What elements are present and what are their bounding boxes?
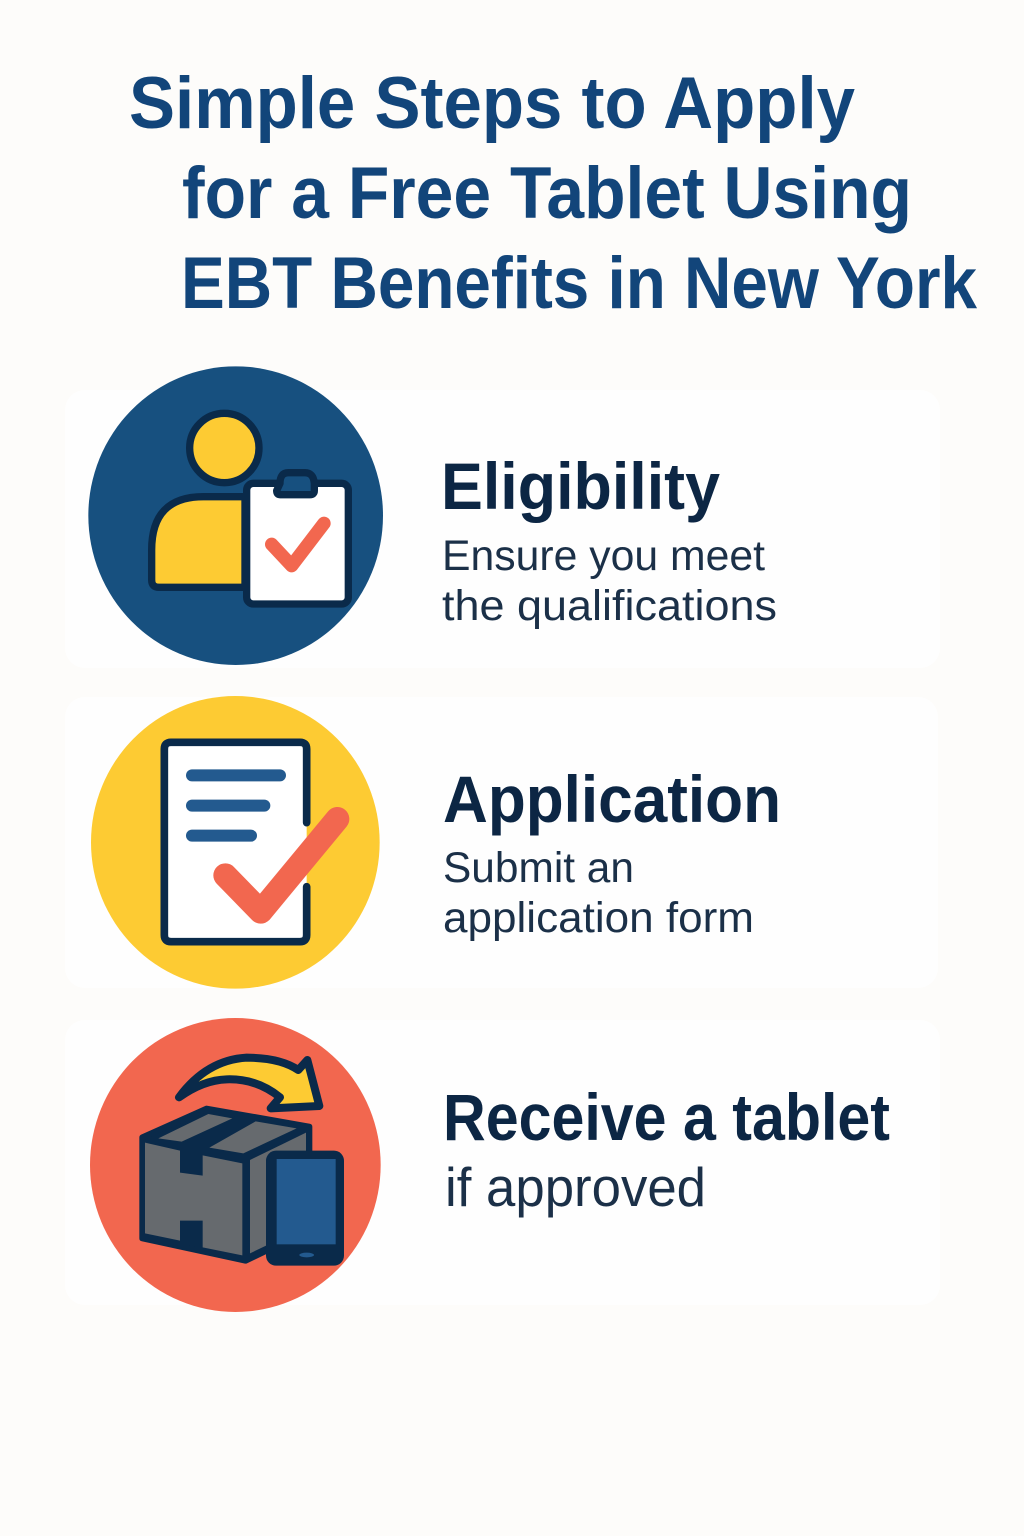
panel: receive a tablet [65, 1018, 940, 1312]
text: if approved: if approved [445, 1156, 706, 1218]
text: application description [443, 844, 754, 942]
text: eligibility description: Ensure you meet [442, 532, 765, 580]
panel: application [65, 696, 938, 989]
panel: eligibility [65, 366, 940, 668]
text: application description: Submit an [443, 844, 634, 892]
icon: box, arrow and tablet [90, 1018, 381, 1312]
text: eligibility description [442, 532, 777, 630]
text: application description: application form [443, 894, 754, 942]
title: Simple Steps to Apply [129, 63, 855, 144]
text: eligibility description: the qualifications [442, 582, 777, 630]
heading: application: Application [443, 762, 781, 836]
icon: person with clipboard [88, 366, 383, 665]
heading: eligibility: Eligibility [441, 449, 720, 523]
icon: document with check mark [91, 696, 380, 989]
title [129, 63, 977, 324]
title: for a Free Tablet Using [182, 153, 912, 234]
heading: receive a tablet: Receive a tablet [443, 1080, 890, 1154]
